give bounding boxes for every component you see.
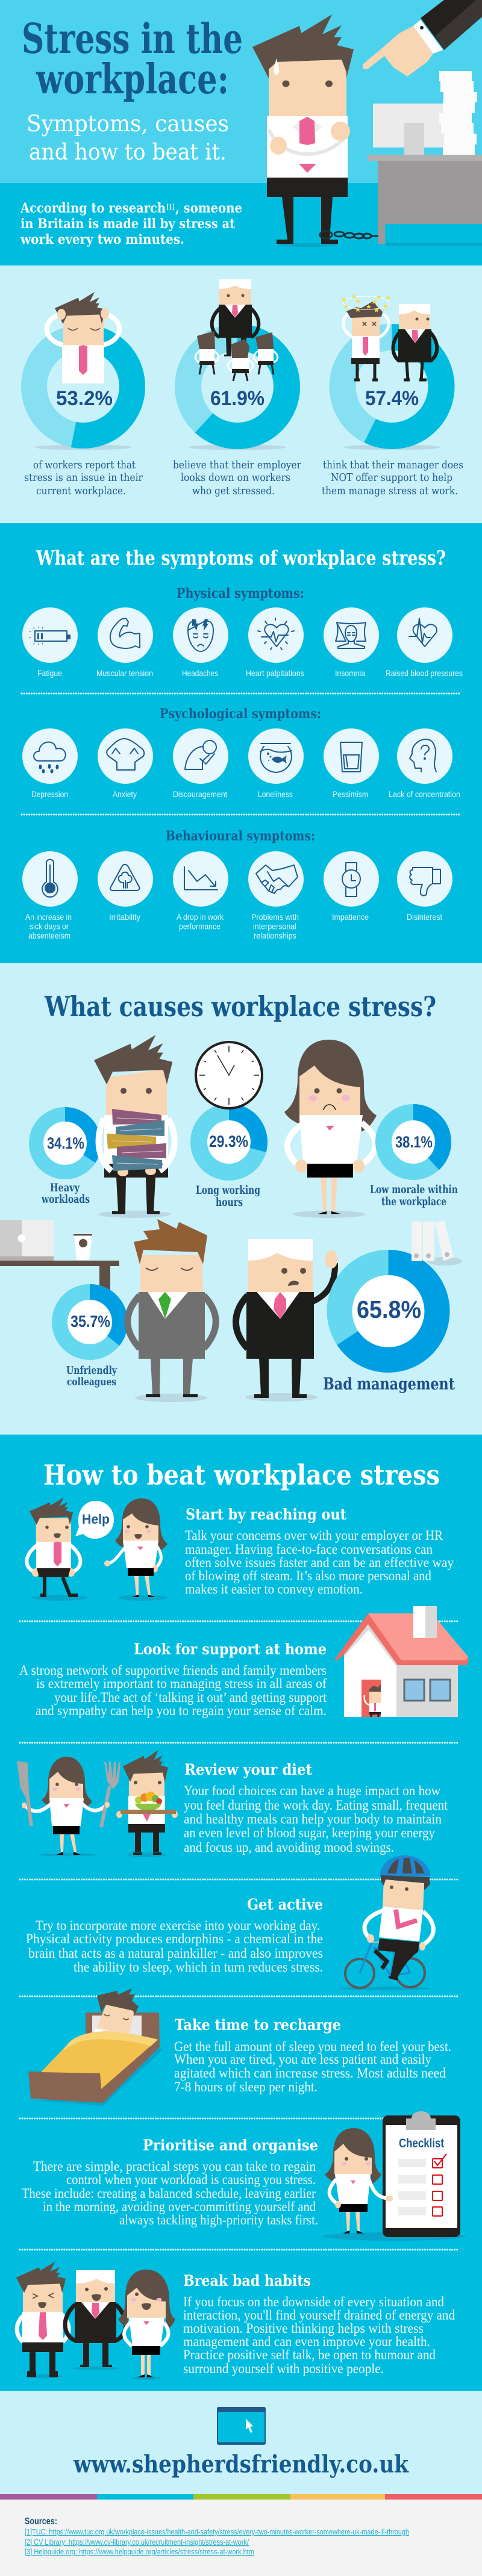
label: absenteeism <box>28 931 70 940</box>
body text: There are simple, practical steps you can take to regain <box>33 2159 316 2174</box>
icon: headache <box>173 607 228 663</box>
label: colleagues <box>67 1376 116 1388</box>
website url: www.shepherdsfriendly.co.uk <box>73 2450 409 2478</box>
tip: recharge <box>28 1988 451 2106</box>
label: Muscular tension <box>96 668 153 678</box>
caption: current workplace. <box>36 485 126 497</box>
value: 65.8% <box>357 1296 421 1323</box>
desk with laptop and coffee <box>0 1220 119 1293</box>
stressed man chained to desk <box>252 14 378 247</box>
icon: thumbs down <box>397 851 452 907</box>
body text: manager. Having face-to-face conversations can <box>185 1542 433 1557</box>
body text: Get the full amount of sleep you need to feel your best. <box>174 2039 451 2054</box>
body text: control when your workload is causing you stress. <box>66 2172 316 2187</box>
donut: unfriendly colleagues 35.7% <box>60 1292 120 1352</box>
speech bubble <box>75 1501 114 1539</box>
body text: brain that acts as a natural painkiller - and also improves <box>28 1946 323 1961</box>
label: Discouragement <box>173 789 227 799</box>
caption: looks down on workers <box>181 471 290 484</box>
intro text: [1] <box>166 203 175 211</box>
donut: bad management 65.8% <box>340 1262 437 1360</box>
icon: fatigue battery <box>22 607 78 663</box>
icon: lack of concentration <box>397 728 452 784</box>
stat: 61.9% <box>173 279 301 497</box>
label <box>177 912 224 931</box>
panel: how to beat stress <box>0 1435 482 2391</box>
body text <box>22 2159 318 2227</box>
title: workplace: <box>36 55 229 104</box>
woman with knife and man with salad <box>17 1750 178 1857</box>
subtitle <box>27 111 229 165</box>
label: sick days or <box>30 921 69 931</box>
heading: Review your diet <box>184 1761 312 1778</box>
icon: muscle <box>98 607 153 663</box>
icon: pessimism glass <box>324 728 379 784</box>
body text <box>19 1663 327 1718</box>
body text <box>184 1783 448 1855</box>
speech bubble: Help <box>82 1512 110 1527</box>
body text: Physical activity produces endorphins - a chemical in the <box>26 1931 323 1946</box>
source links <box>25 2527 409 2556</box>
stressed man icon <box>47 292 119 383</box>
body text: Practice positive self talk, be open to humour and <box>183 2347 436 2362</box>
body text: often solve issues faster and can be an effective way <box>185 1555 454 1570</box>
label: interpersonal <box>253 921 296 931</box>
label: Long working <box>196 1184 260 1197</box>
value: 53.2% <box>56 387 113 410</box>
heading: Start by reaching out <box>186 1506 346 1523</box>
body text: Talk your concerns over with your employer or HR <box>185 1528 443 1543</box>
donut: heavy workloads 34.1% <box>36 1114 94 1172</box>
panel: hero <box>0 0 482 265</box>
tip: reaching out <box>27 1497 454 1601</box>
icon: discouragement <box>173 728 228 784</box>
label <box>25 912 72 940</box>
caption <box>24 459 143 497</box>
body text: an even level of blood sugar, keeping your energy <box>184 1825 435 1840</box>
body text: you feel during the work day. Eating small, frequent <box>184 1798 448 1813</box>
value: 61.9% <box>210 387 264 410</box>
intro text: in Britain is made ill by stress at <box>20 216 236 232</box>
caption <box>322 459 463 497</box>
tip: prioritise <box>22 2111 466 2241</box>
label: Impatience <box>332 912 369 922</box>
body text: agitated which can increase stress. Most adults need <box>174 2065 446 2081</box>
label <box>196 1184 260 1209</box>
body text: If you focus on the downside of every situation and <box>183 2294 444 2309</box>
label <box>66 1364 117 1388</box>
source links: [1]TUC: https://www.tuc.org.uk/workplace-issues/health-and-safety/stress/every-two-minutes-worker-somewhere-uk-made-ill-through <box>25 2527 409 2536</box>
body text: These include: creating a balanced schedule, leaving earlier <box>22 2186 316 2201</box>
panel: causes <box>0 963 482 1435</box>
intro text: According to research <box>20 200 166 216</box>
colour stripe <box>0 2494 482 2500</box>
label: Fatigue <box>37 668 62 678</box>
value: 29.3% <box>209 1132 248 1150</box>
body text: surround yourself with positive people. <box>183 2361 384 2376</box>
tip: support at home <box>19 1606 469 1718</box>
label: Disinterest <box>407 912 442 922</box>
heading: Prioritise and organise <box>143 2137 318 2154</box>
body text: 7-8 hours of sleep per night. <box>174 2079 318 2094</box>
body text <box>26 1918 323 1975</box>
icon: watch <box>324 851 379 907</box>
label: A drop in work <box>177 912 224 922</box>
label: An increase in <box>25 912 72 922</box>
caption: believe that their employer <box>173 459 301 471</box>
caption: of workers report that <box>33 459 136 471</box>
clipboard checklist <box>322 2111 466 2241</box>
value: 34.1% <box>47 1134 84 1152</box>
icon: loneliness fishbowl <box>248 728 304 784</box>
icon: insomnia <box>324 607 379 663</box>
body text: and focus up, and avoiding mood swings. <box>184 1840 394 1855</box>
binders <box>427 1257 462 1265</box>
pointing boss hand <box>363 0 482 76</box>
label: relationships <box>254 931 296 940</box>
dizzy man and manager <box>342 294 437 380</box>
title: Stress in the <box>22 15 243 63</box>
label: Depression <box>31 789 68 799</box>
subheading: physical: Physical symptoms: <box>177 586 304 601</box>
label: Loneliness <box>258 789 293 799</box>
man carrying folders <box>94 1035 175 1218</box>
label: Heavy <box>50 1181 80 1194</box>
sources heading: Sources: <box>25 2516 57 2527</box>
body text: and sympathy can help you to regain your sense of calm. <box>36 1703 327 1718</box>
icon: irritability triangle <box>98 851 153 907</box>
label: Insomnia <box>335 668 365 678</box>
body text: your life.The act of ‘talking it out’ and getting support <box>54 1690 327 1705</box>
label: Lack of concentration <box>389 789 460 799</box>
caption <box>173 459 301 497</box>
label: workloads <box>41 1193 90 1206</box>
man waving in doorway <box>365 1684 381 1717</box>
icon: heart palpitations <box>248 607 304 663</box>
woman pointing at checklist <box>325 2128 393 2233</box>
icon: thermometer <box>22 851 78 907</box>
body text: When you are tired, you are less patient and easily <box>174 2052 431 2067</box>
stat: 53.2% <box>24 292 143 497</box>
tip: get active <box>26 1855 433 1990</box>
label: Anxiety <box>113 789 137 799</box>
subtitle: Symptoms, causes <box>27 111 229 137</box>
body text: and healthy meals can help your body to maintain <box>184 1811 442 1826</box>
label: performance <box>179 921 221 931</box>
body text <box>174 2039 451 2094</box>
icon: anxiety <box>98 728 153 784</box>
label <box>370 1183 458 1208</box>
body text: always tackling high-priority tasks first. <box>119 2212 318 2227</box>
desk with monitor and papers <box>368 71 482 246</box>
body text <box>183 2294 455 2376</box>
tip: review diet <box>17 1750 448 1857</box>
intro text: work every two minutes. <box>20 232 184 247</box>
body text: Try to incorporate more exercise into your working day. <box>36 1918 320 1933</box>
intro text: , someone <box>175 200 242 216</box>
caption: NOT offer support to help <box>331 471 452 484</box>
label: Pessimism <box>333 789 368 799</box>
label: Raised blood pressures <box>386 668 463 678</box>
source links: [3] Helpguide.org: https://www.helpguide.org/articles/stress/stress-at-work.htm <box>25 2547 254 2556</box>
cyclist <box>340 1855 433 1990</box>
panel: sources <box>0 2500 482 2576</box>
caption: who get stressed. <box>192 485 275 497</box>
body text: management and can even improve your health. <box>183 2334 430 2349</box>
caption: stress is an issue in their <box>24 471 143 484</box>
icon: browser window <box>217 2407 266 2445</box>
body text: is extremely important to managing stress in all areas of <box>36 1676 327 1691</box>
label: Problems with <box>251 912 299 922</box>
value: 57.4% <box>365 387 419 410</box>
checklist title: Checklist <box>399 2137 444 2150</box>
source links: [2] CV Library: https://www.cv-library.co.uk/recruitment-insight/stress-at-work/ <box>25 2537 249 2547</box>
caption: them manage stress at work. <box>322 485 458 497</box>
body text: makes it easier to convey emotion. <box>185 1581 363 1597</box>
tip: bad habits <box>16 2262 455 2380</box>
label: Headaches <box>182 668 218 678</box>
label: Bad management <box>323 1375 455 1394</box>
heading: Look for support at home <box>134 1640 327 1658</box>
panel: website call to action <box>0 2391 482 2494</box>
body text: Your food choices can have a huge impact on how <box>184 1783 440 1798</box>
body text: A strong network of supportive friends and family members <box>19 1663 327 1678</box>
heading: Break bad habits <box>183 2272 311 2289</box>
house <box>334 1606 469 1717</box>
stat: 57.4% <box>322 294 463 497</box>
panel: key statistics <box>0 265 482 523</box>
icon: handshake <box>248 851 304 907</box>
body text <box>185 1528 454 1597</box>
heading: Get active <box>247 1896 323 1913</box>
label: the workplace <box>381 1195 446 1208</box>
label <box>41 1181 90 1206</box>
subheading: psychological: Psychological symptoms: <box>160 706 321 722</box>
label: Unfriendly <box>66 1364 117 1377</box>
three happy colleagues <box>16 2262 175 2380</box>
man and woman talking <box>27 1497 167 1601</box>
panel: symptoms <box>0 523 482 963</box>
subtitle: and how to beat it. <box>29 139 227 165</box>
label <box>251 912 299 940</box>
icon: blood pressure heart <box>397 607 452 663</box>
clock <box>196 1042 262 1108</box>
value: 38.1% <box>395 1133 433 1151</box>
heading: Take time to recharge <box>175 2016 341 2034</box>
man sleeping in bed <box>28 1988 163 2106</box>
body text: the ability to sleep, which in turn reduces stress. <box>74 1960 323 1975</box>
body text: of blowing off steam. It’s also more personal and <box>185 1568 431 1583</box>
donut: low morale 38.1% <box>383 1113 443 1172</box>
donut: long working hours 29.3% <box>199 1112 259 1172</box>
bad manager in black suit <box>236 1239 337 1401</box>
value: 35.7% <box>70 1312 110 1330</box>
icon: depression cloud <box>22 728 78 784</box>
body text: motivation. Positive thinking helps with stress <box>183 2321 424 2336</box>
intro text <box>20 200 242 247</box>
body text: in the morning, avoiding over-committing yourself and <box>43 2199 316 2214</box>
boss looking down on workers <box>195 279 278 381</box>
label: Irritability <box>109 912 140 922</box>
icon: performance chart <box>173 851 228 907</box>
label: Heart palpitations <box>246 668 304 678</box>
subheading: behavioural: Behavioural symptoms: <box>166 828 315 844</box>
label: hours <box>216 1196 243 1209</box>
body text: interaction, you'll find yourself drained of energy and <box>183 2308 455 2323</box>
colleague in grey suit <box>128 1219 216 1402</box>
binders on shelf <box>412 1220 454 1261</box>
title <box>22 15 243 104</box>
unhappy woman <box>284 1040 377 1218</box>
